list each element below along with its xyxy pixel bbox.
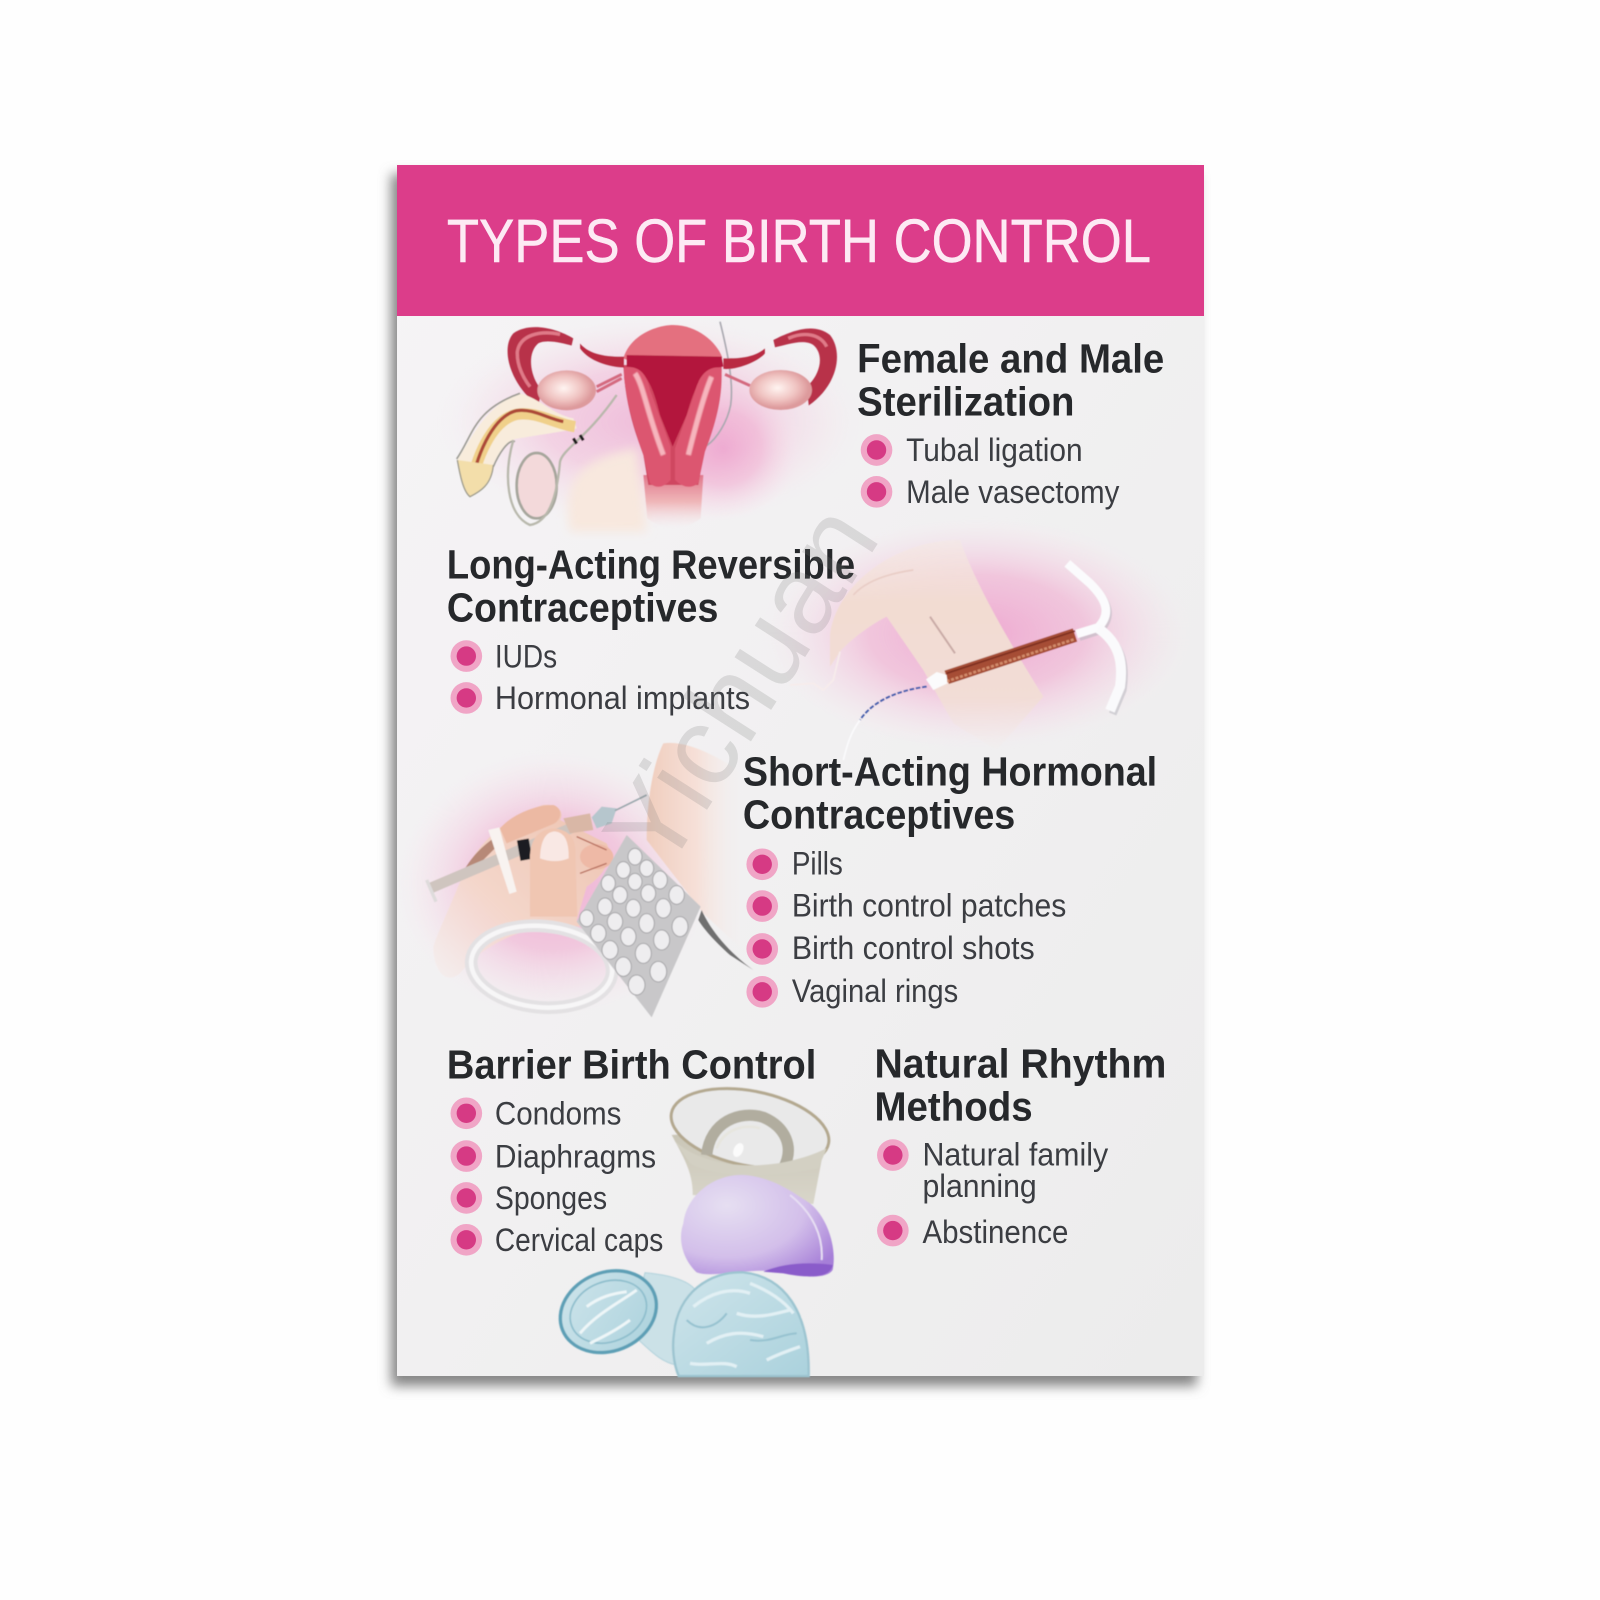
section: natural rhythm methods: Abstinence (922, 1213, 1068, 1250)
section: natural rhythm methods: Methods (874, 1083, 1033, 1129)
section: short-acting hormonal contraceptives: Vaginal rings (792, 972, 958, 1009)
section: barrier birth control (447, 1042, 816, 1258)
section: female and male sterilization: Sterilization (857, 378, 1074, 424)
section: short-acting hormonal contraceptives: Short-Acting Hormonal (743, 749, 1157, 795)
section: barrier birth control: Condoms (495, 1094, 621, 1131)
illustration: female and male reproductive anatomy (437, 315, 863, 532)
header banner (397, 165, 1204, 316)
illustration: syringe, hand, pill blister and vaginal ring (397, 743, 753, 1017)
section: natural rhythm methods: planning (922, 1167, 1037, 1204)
section: short-acting hormonal contraceptives: Birth control shots (792, 929, 1035, 966)
section: barrier birth control: Barrier Birth Control (447, 1042, 816, 1088)
section: natural rhythm methods (874, 1041, 1166, 1250)
section: female and male sterilization: Tubal ligation (906, 431, 1083, 468)
section: natural rhythm methods: Natural family (922, 1135, 1109, 1172)
section: short-acting hormonal contraceptives: Birth control patches (792, 886, 1066, 923)
poster panel (397, 165, 1204, 1376)
section: long-acting reversible contraceptives: Long-Acting Reversible (447, 542, 855, 588)
section: female and male sterilization: Male vasectomy (906, 473, 1120, 510)
section: barrier birth control: Cervical caps (495, 1221, 663, 1258)
section: long-acting reversible contraceptives: Hormonal implants (495, 679, 750, 716)
section: short-acting hormonal contraceptives (743, 749, 1157, 1009)
section: female and male sterilization: Female and Male (857, 335, 1164, 381)
section: long-acting reversible contraceptives: Contraceptives (447, 584, 718, 630)
section: female and male sterilization (857, 335, 1164, 510)
section: long-acting reversible contraceptives (447, 542, 855, 716)
section: long-acting reversible contraceptives: IUDs (495, 637, 557, 674)
title: TYPES OF BIRTH CONTROL (447, 207, 1151, 275)
section: barrier birth control: Sponges (495, 1179, 607, 1216)
section: short-acting hormonal contraceptives: Pills (792, 844, 843, 881)
section: natural rhythm methods: Natural Rhythm (874, 1041, 1166, 1087)
section: barrier birth control: Diaphragms (495, 1137, 656, 1174)
illustration: arm implant and IUD (760, 517, 1193, 760)
poster drop shadow (391, 174, 1197, 1386)
illustration: diaphragm, sponge and condoms (548, 1076, 836, 1376)
section: short-acting hormonal contraceptives: Contraceptives (743, 792, 1015, 838)
watermark: Yichuan (579, 483, 902, 889)
text layer (447, 207, 1166, 1258)
